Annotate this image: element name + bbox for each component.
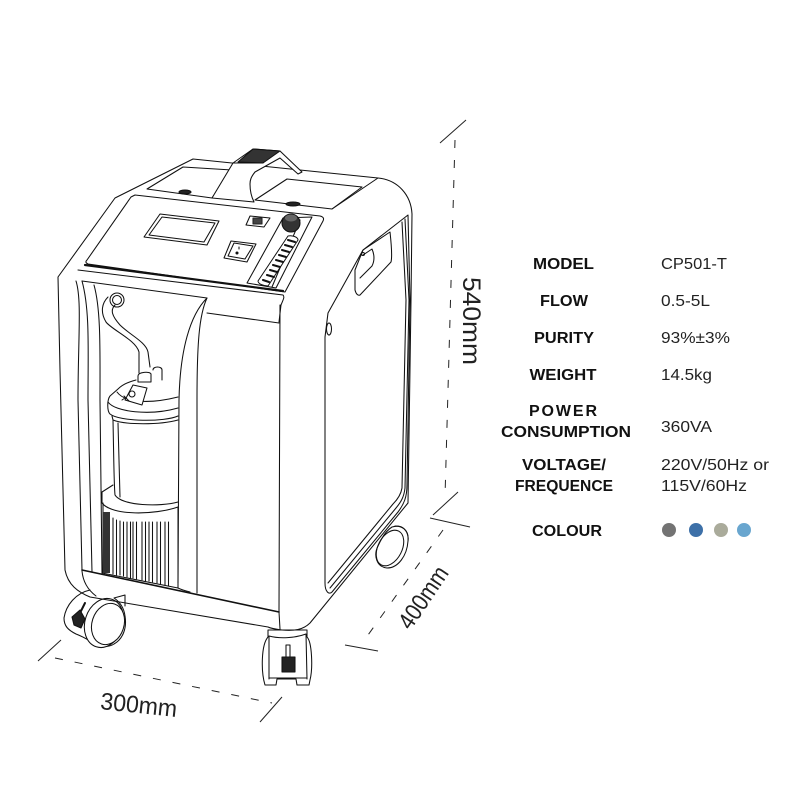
row: purity: 93%±3% — [661, 330, 730, 347]
dimension: height 540mm — [433, 120, 485, 515]
row: purity: PURITY — [534, 330, 594, 347]
row: power consumption: 360VA — [661, 419, 712, 436]
row: model — [533, 256, 727, 273]
row: flow: 0.5-5L — [661, 293, 710, 310]
machine body — [58, 159, 412, 630]
spec table — [501, 256, 770, 540]
row: flow: FLOW — [540, 293, 589, 310]
row: voltage and frequence: VOLTAGE/ — [522, 457, 607, 474]
row: colour: COLOUR — [532, 523, 602, 540]
side recessed handle and panel — [325, 215, 410, 593]
power switch — [224, 241, 256, 262]
row: voltage and frequence: 220V/50Hz or — [661, 457, 770, 474]
row: model: CP501-T — [661, 256, 727, 273]
colour swatches — [662, 523, 751, 537]
carry handle — [212, 149, 302, 202]
row: weight — [530, 367, 712, 384]
row: model: MODEL — [533, 256, 594, 273]
front right caster wheel — [262, 630, 312, 685]
dimension: height 540mm: 540mm — [457, 277, 485, 365]
display screen — [144, 214, 219, 245]
dimension: width 300mm: 300mm — [99, 688, 178, 723]
dimension: width 300mm — [38, 640, 282, 723]
oxygen concentrator illustration — [58, 149, 412, 685]
top cover panels — [147, 167, 362, 209]
USB port icon — [246, 216, 270, 227]
humidifier bottle — [108, 367, 178, 505]
row: colour — [532, 523, 751, 540]
flow meter and knob — [247, 214, 312, 288]
dimension: depth 400mm: 400mm — [393, 561, 455, 634]
dimension: depth 400mm — [345, 518, 470, 651]
row: weight: 14.5kg — [661, 367, 712, 384]
front recess edge — [76, 281, 280, 629]
control panel — [78, 178, 378, 322]
row: voltage and frequence: 115V/60Hz — [661, 478, 747, 495]
row: flow — [540, 293, 710, 310]
rear caster wheel — [371, 526, 409, 570]
front left caster wheel — [64, 590, 130, 653]
row: purity — [534, 330, 730, 347]
filter base with vents — [102, 485, 178, 588]
row: voltage and frequence — [515, 457, 770, 495]
row: power consumption: CONSUMPTION — [501, 424, 631, 441]
row: power consumption — [501, 403, 712, 441]
row: voltage and frequence: FREQUENCE — [515, 478, 613, 495]
row: weight: WEIGHT — [530, 367, 597, 384]
row: power consumption: POWER — [529, 403, 597, 420]
water tube and outlet — [102, 293, 150, 373]
